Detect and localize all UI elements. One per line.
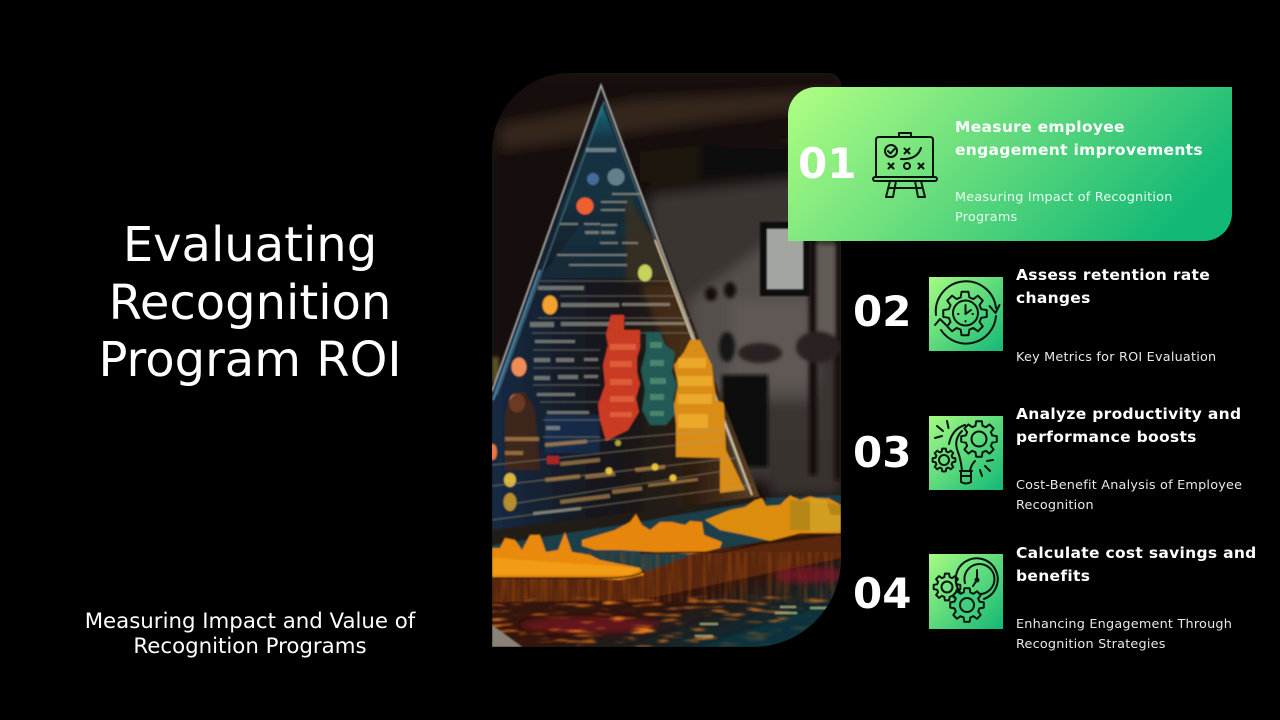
description 04: Enhancing Engagement Through Recognition Strategies [1016, 617, 1232, 652]
heading 02: Assess retention rate changes [1016, 266, 1210, 307]
number 04: 04 [853, 569, 911, 618]
number 01: 01 [798, 139, 856, 188]
subtitle: Measuring Impact and Value of Recognition Programs [85, 609, 415, 659]
icon: bulb with gears [929, 416, 1003, 490]
water highlights [695, 606, 828, 637]
description 03: Cost-Benefit Analysis of Employee Recognition [1016, 478, 1242, 513]
map table with city skyline [492, 495, 845, 647]
skyline left [492, 532, 644, 580]
description 02: Key Metrics for ROI Evaluation [1016, 350, 1216, 365]
icon: gears with stopwatch [929, 554, 1003, 629]
heading 04: Calculate cost savings and benefits [1016, 544, 1257, 585]
icon: gear with clock [929, 277, 1003, 351]
number 03: 03 [853, 428, 911, 477]
lower label rows [492, 430, 752, 520]
background room [492, 73, 841, 647]
heading 01: Measure employee engagement improvements [955, 118, 1203, 159]
description 01: Measuring Impact of Recognition Programs [955, 190, 1173, 225]
panel: step 01 [788, 87, 1232, 241]
glass pyramid [489, 85, 760, 535]
title: Evaluating Recognition Program ROI [98, 217, 402, 388]
red column [598, 315, 640, 441]
icon: strategy board [872, 132, 938, 198]
heading 03: Analyze productivity and performance boosts [1016, 405, 1241, 446]
photo: glass pyramid over glowing city map [492, 73, 841, 647]
room furniture [492, 175, 841, 480]
skyline right [705, 495, 841, 541]
number 02: 02 [853, 287, 911, 336]
green column [641, 332, 677, 425]
skyline middle [582, 514, 722, 554]
picture frame [760, 222, 810, 296]
yellow column [674, 340, 745, 493]
